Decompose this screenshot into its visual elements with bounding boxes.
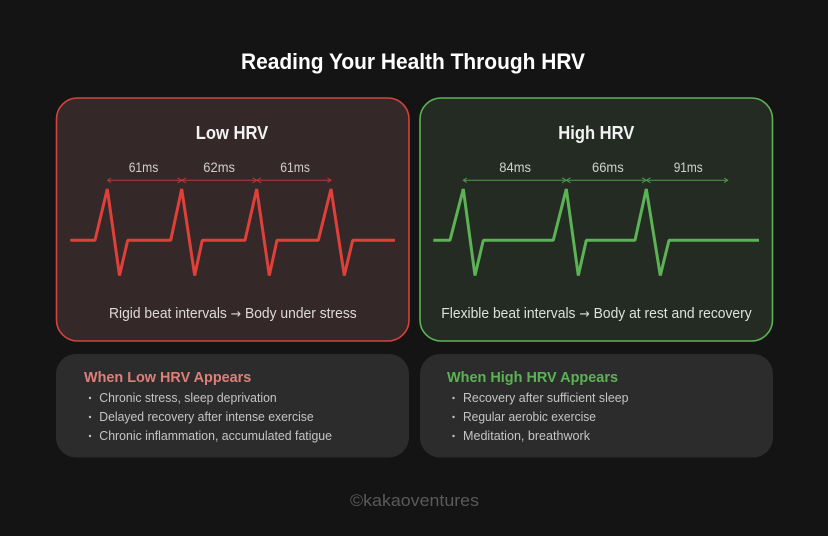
caption: high HRV: Flexible beat intervals → Body at rest and recovery [441, 306, 752, 322]
card heading: low: When Low HRV Appears [84, 370, 251, 386]
panel: low HRV [56, 98, 409, 341]
bullet list: low: Chronic inflammation, accumulated fatigue [99, 429, 332, 443]
interval labels: high HRV [499, 159, 703, 175]
heading: low HRV: Low HRV [196, 123, 268, 143]
card heading: high: When High HRV Appears [447, 370, 618, 386]
caption: low HRV: Rigid beat intervals → Body under stress [109, 306, 357, 322]
bullet list: high: Recovery after sufficient sleep [463, 391, 629, 405]
footer credit: ©kakaoventures [350, 491, 479, 510]
bullet list: high: Meditation, breathwork [463, 429, 591, 443]
interval labels: high HRV: 66ms [592, 159, 624, 175]
interval labels: high HRV: 84ms [499, 159, 531, 175]
interval arrows: low HRV [108, 178, 331, 183]
interval labels: low HRV: 62ms [203, 159, 235, 175]
card background: low [56, 354, 409, 458]
interval arrows: high HRV [463, 178, 728, 183]
card: when low HRV appears [56, 354, 409, 458]
heading: high HRV: High HRV [558, 123, 634, 143]
title: Reading Your Health Through HRV [241, 49, 585, 74]
interval labels: low HRV: 61ms [129, 159, 158, 175]
panel background: high HRV [420, 98, 772, 341]
bullet list: low: Delayed recovery after intense exercise [99, 410, 314, 424]
interval labels: low HRV: 61ms [280, 159, 310, 175]
interval labels: low HRV [129, 159, 310, 175]
card: when high HRV appears [420, 354, 773, 458]
bullet list: low: Chronic stress, sleep deprivation [99, 391, 277, 405]
interval labels: high HRV: 91ms [674, 159, 703, 175]
ECG line: high HRV [433, 189, 759, 276]
bullet list: high [452, 391, 629, 443]
card background: high [420, 354, 773, 458]
panel background: low HRV [56, 98, 409, 341]
panel: high HRV [420, 98, 772, 341]
bullet list: low [89, 391, 332, 443]
ECG line: low HRV [70, 189, 395, 276]
bullet list: high: Regular aerobic exercise [463, 410, 596, 424]
